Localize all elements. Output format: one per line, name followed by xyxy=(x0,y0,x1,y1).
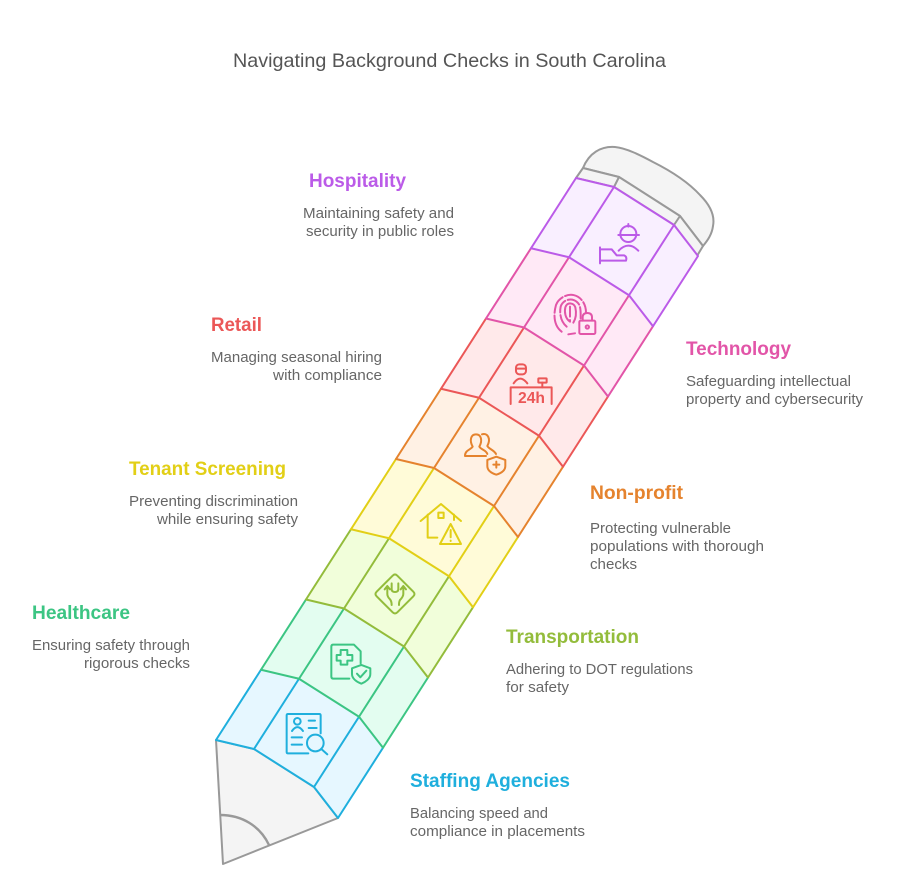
icon: house with warning xyxy=(421,504,461,544)
label: hospitality: Maintaining safety and xyxy=(303,205,454,222)
label: technology: Technology xyxy=(686,339,791,360)
label: transportation xyxy=(506,627,693,696)
label: staffing agencies xyxy=(410,771,585,840)
segment: hospitality xyxy=(531,178,698,326)
label: transportation: for safety xyxy=(506,679,569,696)
label: non-profit xyxy=(590,483,764,573)
label: healthcare xyxy=(32,603,190,672)
label: non-profit: checks xyxy=(590,556,637,573)
icon: fingerprint and lock xyxy=(554,295,595,334)
label: retail: with compliance xyxy=(272,367,382,384)
label: hospitality xyxy=(303,171,454,240)
label: retail: Managing seasonal hiring xyxy=(211,349,382,366)
label: technology xyxy=(686,339,863,408)
icon: road diamond with arrows xyxy=(375,574,414,613)
segment: staffing agencies xyxy=(216,670,383,818)
icon: 24h reception desk: 24h xyxy=(518,390,545,407)
pencil tip xyxy=(216,740,338,864)
icon: profile search xyxy=(287,714,327,754)
title: Navigating Background Checks in South Carolina xyxy=(233,50,666,72)
icon: hand and worker xyxy=(600,224,639,263)
label: tenant screening: Preventing discrimination xyxy=(129,493,298,510)
label: staffing agencies: Balancing speed and xyxy=(410,805,548,822)
icon: people with shield xyxy=(465,434,505,475)
pencil infographic xyxy=(216,147,713,864)
label: staffing agencies: compliance in placements xyxy=(410,823,585,840)
icon: 24h reception desk xyxy=(511,364,552,407)
label: tenant screening xyxy=(129,459,299,528)
label: non-profit: populations with thorough xyxy=(590,538,764,555)
label: technology: property and cybersecurity xyxy=(686,391,863,408)
label: tenant screening: Tenant Screening xyxy=(129,459,286,480)
label: tenant screening: while ensuring safety xyxy=(156,511,299,528)
label: hospitality: Hospitality xyxy=(309,171,406,192)
segment: tenant screening xyxy=(351,459,518,607)
label: transportation: Adhering to DOT regulations xyxy=(506,661,693,678)
label: healthcare: Ensuring safety through xyxy=(32,637,190,654)
label: non-profit: Non-profit xyxy=(590,483,684,504)
label: retail xyxy=(211,315,382,384)
label: hospitality: security in public roles xyxy=(306,223,454,240)
label: healthcare: rigorous checks xyxy=(84,655,190,672)
segment: retail xyxy=(441,318,608,467)
label: technology: Safeguarding intellectual xyxy=(686,373,851,390)
label: healthcare: Healthcare xyxy=(32,603,130,624)
segment: non-profit xyxy=(396,389,563,537)
segment: technology xyxy=(486,248,653,396)
icon: medical document with shield xyxy=(331,645,370,684)
label: transportation: Transportation xyxy=(506,627,639,648)
label: non-profit: Protecting vulnerable xyxy=(590,520,731,537)
label: retail: Retail xyxy=(211,315,262,336)
segment: transportation xyxy=(306,529,473,678)
pencil eraser xyxy=(576,147,713,256)
label: staffing agencies: Staffing Agencies xyxy=(410,771,570,792)
segment: healthcare xyxy=(261,600,428,748)
